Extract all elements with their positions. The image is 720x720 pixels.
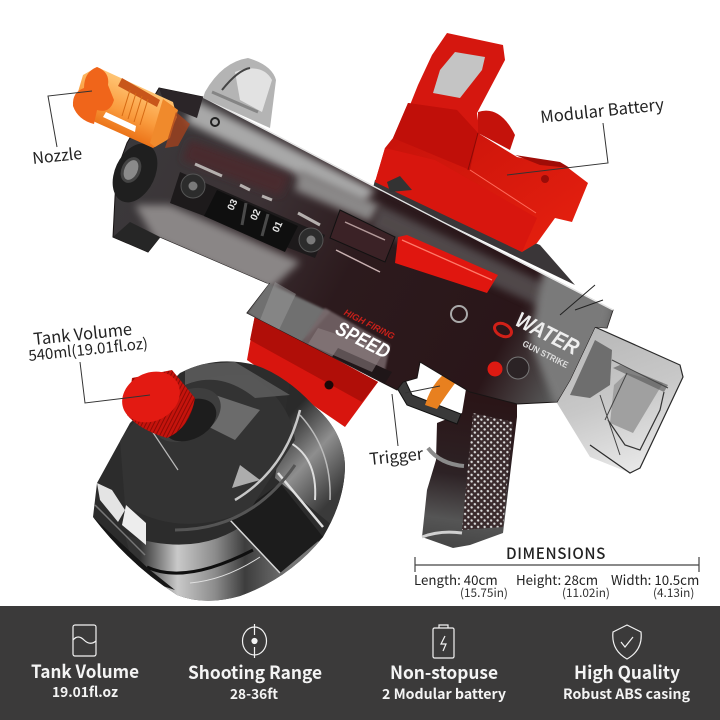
label: tank volume: 540ml(19.01fl.oz) (27, 333, 149, 366)
ring detail (451, 306, 467, 322)
orange nozzle (73, 67, 190, 148)
water gun illustration (73, 33, 683, 548)
tank cap (113, 362, 195, 438)
tank drum (93, 361, 345, 601)
feature: shooting range: 28-36ft (230, 684, 278, 704)
numbered rail (170, 164, 325, 258)
magazine neck (247, 315, 378, 427)
feature: tank volume: Tank Volume (31, 658, 139, 684)
body shading (135, 100, 613, 405)
icon: target (242, 624, 266, 658)
feature: shooting range: Shooting Range (188, 659, 322, 685)
muzzle end cap (104, 136, 166, 210)
icon: battery (433, 625, 454, 658)
water gun strike logo: GUN STRIKE (521, 339, 570, 370)
feature: tank volume (31, 625, 139, 702)
rail number 02: 02 (249, 207, 264, 222)
dimensions block (414, 542, 699, 601)
left white patches (97, 483, 125, 522)
bottom feature band (0, 606, 720, 720)
icon: tank (73, 625, 96, 656)
feature: non-stop use (382, 625, 506, 704)
rail number 01: 01 (271, 219, 286, 234)
pistol grip (422, 383, 517, 548)
upper dome (120, 412, 295, 514)
length: Length: 40cm (414, 570, 498, 589)
trigger guard and trigger (397, 372, 461, 424)
water gun strike logo: WATER (511, 307, 583, 360)
feature: shooting range (188, 624, 322, 704)
height: Height: 28cm (516, 570, 598, 589)
width: Width: 10.5cm (611, 570, 699, 589)
rail number 03: 03 (226, 197, 241, 212)
vent detail (330, 210, 395, 262)
dimensions block: (11.02in) (562, 584, 610, 601)
dimensions heading: DIMENSIONS (506, 542, 606, 564)
right shell (275, 384, 345, 524)
label: tank volume: Tank Volume (32, 316, 133, 350)
sight mount rail (373, 180, 575, 285)
dimensions block: (15.75in) (460, 584, 508, 601)
red button (488, 362, 502, 376)
feature: high quality: Robust ABS casing (563, 684, 691, 704)
icon: shield (613, 625, 641, 659)
speed decal (308, 307, 396, 372)
speed decal: HIGH FIRING (342, 307, 396, 341)
feature: high quality (563, 625, 691, 704)
lower band (132, 529, 319, 601)
feature: tank volume: 19.01fl.oz (52, 682, 118, 702)
feature: high quality: High Quality (574, 659, 681, 685)
gun body (104, 88, 613, 405)
feature: non-stop use: Non-stopuse (390, 659, 498, 685)
rear stock (552, 327, 683, 473)
label: modular battery (507, 91, 665, 175)
label: nozzle (31, 91, 92, 169)
label: nozzle: Nozzle (31, 140, 83, 169)
red light strip (395, 235, 498, 293)
feature: non-stop use: 2 Modular battery (382, 684, 506, 704)
dimensions block: (4.13in) (653, 584, 694, 601)
red sight and battery module (375, 33, 588, 252)
label: modular battery: Modular Battery (539, 91, 665, 128)
label: trigger: Trigger (368, 440, 425, 470)
water gun strike logo (492, 307, 583, 370)
knob (507, 357, 529, 379)
speed decal: SPEED (332, 318, 394, 364)
label: tank volume (27, 316, 150, 403)
dark block (230, 483, 323, 573)
label: trigger (368, 386, 440, 470)
front sight (203, 58, 276, 128)
